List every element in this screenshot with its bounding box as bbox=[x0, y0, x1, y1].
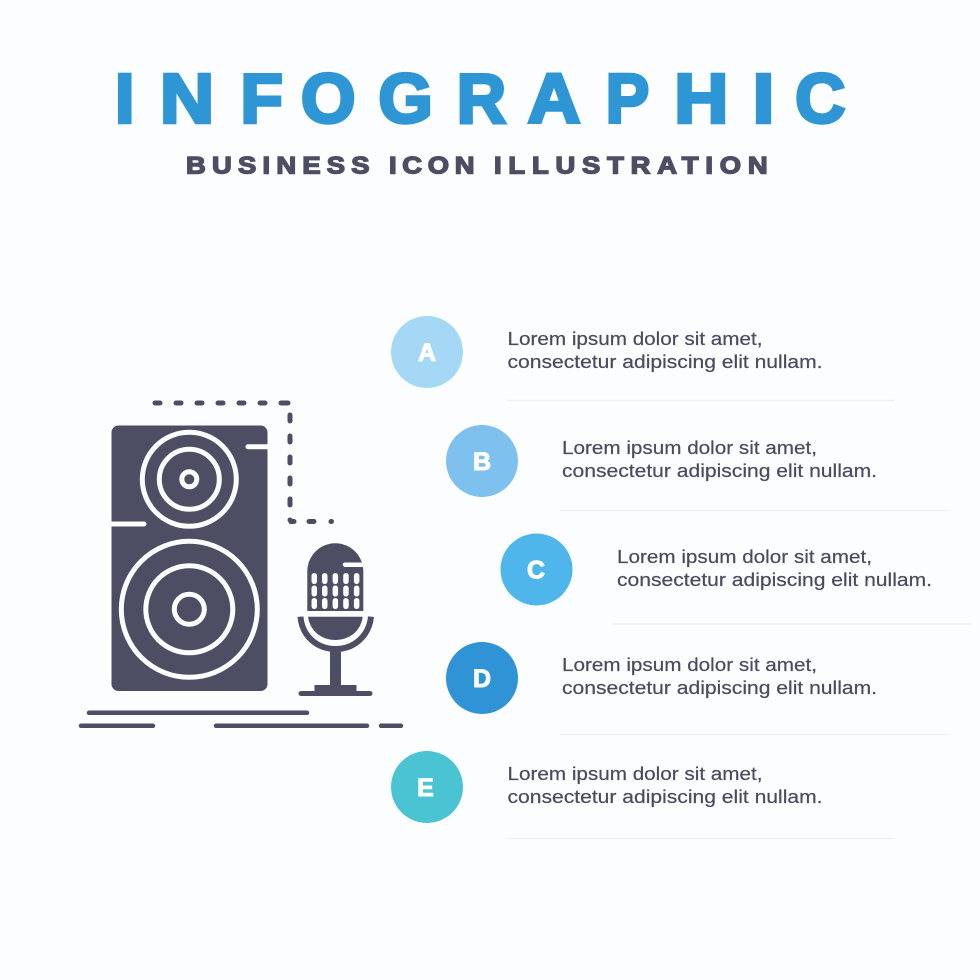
title: P bbox=[606, 60, 649, 138]
subtitle: ILLUSTRATION bbox=[494, 153, 768, 179]
text E bbox=[508, 764, 822, 807]
text D: Lorem ipsum dolor sit amet, bbox=[562, 655, 817, 675]
title: H bbox=[674, 60, 728, 138]
badge E: E bbox=[417, 774, 434, 802]
badge D bbox=[446, 642, 518, 714]
text B: consectetur adipiscing elit nullam. bbox=[562, 461, 877, 481]
title: O bbox=[301, 60, 355, 138]
title bbox=[115, 59, 845, 138]
title: I bbox=[753, 59, 774, 138]
text D: consectetur adipiscing elit nullam. bbox=[562, 678, 877, 698]
title: I bbox=[115, 60, 134, 138]
item D bbox=[446, 642, 949, 734]
icon: speaker and microphone bbox=[81, 403, 401, 726]
item B bbox=[446, 425, 949, 510]
text A: consectetur adipiscing elit nullam. bbox=[508, 352, 822, 372]
text E: Lorem ipsum dolor sit amet, bbox=[508, 764, 762, 784]
badge E bbox=[391, 751, 463, 823]
text A: Lorem ipsum dolor sit amet, bbox=[508, 329, 762, 349]
text E: consectetur adipiscing elit nullam. bbox=[508, 787, 822, 807]
text C: Lorem ipsum dolor sit amet, bbox=[617, 547, 872, 567]
badge D: D bbox=[473, 665, 491, 693]
text C bbox=[617, 547, 932, 590]
badge C: C bbox=[527, 556, 545, 584]
text D bbox=[562, 655, 877, 698]
microphone bbox=[298, 543, 372, 696]
subtitle: ICON bbox=[389, 153, 474, 179]
subtitle: BUSINESS bbox=[186, 153, 370, 179]
badge B bbox=[446, 425, 518, 497]
title: F bbox=[240, 59, 283, 138]
text B bbox=[562, 438, 877, 481]
item C bbox=[500, 534, 972, 624]
badge B: B bbox=[473, 448, 491, 476]
badge C bbox=[500, 534, 572, 606]
badge A bbox=[391, 316, 463, 388]
badge A: A bbox=[418, 339, 436, 367]
item A bbox=[391, 316, 895, 400]
speaker bbox=[112, 426, 268, 691]
text B: Lorem ipsum dolor sit amet, bbox=[562, 438, 817, 458]
item E bbox=[391, 751, 895, 838]
title: N bbox=[160, 60, 214, 138]
title: R bbox=[457, 59, 506, 138]
title: A bbox=[528, 60, 580, 138]
text C: consectetur adipiscing elit nullam. bbox=[617, 570, 932, 590]
ground lines bbox=[81, 713, 401, 726]
dashed connector bbox=[155, 403, 332, 522]
title: C bbox=[795, 59, 845, 138]
title: G bbox=[378, 59, 433, 138]
subtitle bbox=[186, 153, 768, 179]
text A bbox=[508, 329, 822, 372]
